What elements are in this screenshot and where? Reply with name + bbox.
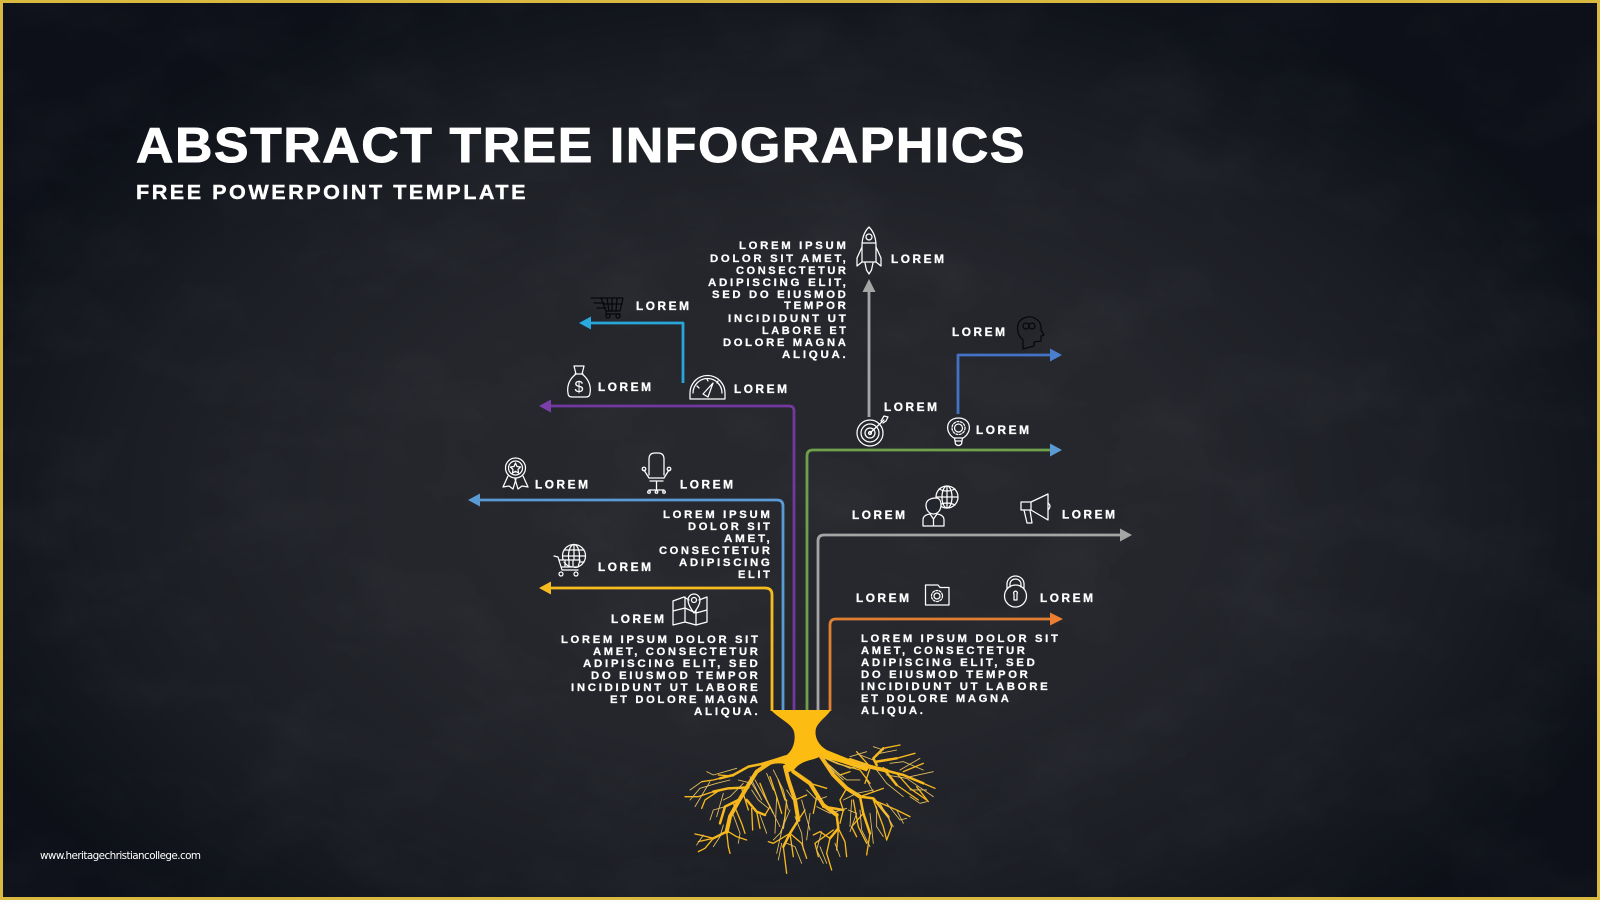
- text block: rocket paragraph: DOLOR SIT AMET,: [710, 253, 848, 265]
- text block: orange branch paragraph: INCIDIDUNT UT LABORE: [861, 681, 1050, 693]
- icon: gear folder: [926, 585, 949, 605]
- branch: dark blue arrow: [958, 348, 1062, 414]
- text block: yellow branch paragraph: DO EIUSMOD TEMPOR: [591, 670, 760, 682]
- label: cart: LOREM: [636, 300, 692, 313]
- text block: blue branch paragraph: CONSECTETUR: [659, 545, 772, 557]
- branch: orange arrow: [830, 612, 1063, 711]
- text block: yellow branch paragraph: ALIQUA.: [694, 706, 760, 718]
- website url: www.heritagechristiancollege.com: [40, 850, 201, 862]
- text block: orange branch paragraph: ALIQUA.: [861, 705, 926, 717]
- icon: map with pin: [673, 594, 707, 625]
- text block: rocket paragraph: DOLORE MAGNA: [723, 337, 848, 349]
- text block: rocket paragraph: SED DO EIUSMOD: [712, 289, 848, 301]
- title: ABSTRACT TREE INFOGRAPHICS: [136, 119, 1026, 173]
- text block: blue branch paragraph: DOLOR SIT: [688, 521, 772, 533]
- text block: rocket paragraph: LABORE ET: [762, 325, 848, 337]
- icon: gauge: [690, 376, 725, 399]
- icon: award ribbon: [503, 458, 528, 489]
- text block: yellow branch paragraph: LOREM IPSUM DOLOR SIT: [561, 634, 760, 646]
- branch: yellow arrow: [539, 582, 772, 711]
- icon: megaphone: [1021, 494, 1050, 523]
- label: gauge: LOREM: [734, 383, 790, 396]
- label: map: LOREM: [611, 613, 666, 626]
- text block: orange branch paragraph: AMET, CONSECTETUR: [861, 645, 1028, 657]
- text block: orange branch paragraph: DO EIUSMOD TEMPOR: [861, 669, 1030, 681]
- label: rocket: LOREM: [891, 253, 946, 266]
- trunk: [759, 710, 870, 773]
- icon: light bulb with gear: [948, 418, 969, 446]
- text block: blue branch paragraph: ADIPISCING: [679, 557, 772, 569]
- label: chair: LOREM: [680, 478, 736, 492]
- icon: person with globe: [923, 486, 958, 526]
- text block: yellow branch paragraph: [561, 634, 760, 718]
- branch: cyan arrow: [579, 316, 683, 383]
- icon: money bag: $: [575, 379, 584, 396]
- branch: upward grey arrow: [862, 279, 876, 417]
- text block: yellow branch paragraph: ET DOLORE MAGNA: [610, 694, 760, 706]
- label: person: LOREM: [852, 509, 908, 522]
- secondary roots: [713, 748, 923, 847]
- text block: blue branch paragraph: AMET,: [724, 533, 772, 545]
- tree roots: [685, 710, 935, 873]
- label: megaphone: LOREM: [1062, 508, 1118, 522]
- text block: rocket paragraph: ADIPISCING ELIT,: [708, 277, 848, 289]
- main roots: [727, 755, 887, 832]
- branch: purple arrow: [539, 400, 794, 711]
- icon: globe cart: [554, 544, 586, 576]
- text block: blue branch paragraph: ELIT: [738, 569, 772, 581]
- text block: rocket paragraph: LOREM IPSUM: [739, 240, 848, 252]
- text block: yellow branch paragraph: ADIPISCING ELIT, SED: [583, 658, 760, 670]
- root twigs: [690, 747, 933, 863]
- label: award: LOREM: [535, 478, 590, 492]
- icon: shopping cart (dark): [591, 298, 623, 318]
- text block: rocket paragraph: ALIQUA.: [782, 349, 848, 361]
- icon: target: [857, 416, 888, 446]
- text block: rocket paragraph: [708, 240, 848, 361]
- branch: green arrow: [807, 444, 1062, 711]
- text block: rocket paragraph: CONSECTETUR: [736, 265, 848, 277]
- text block: yellow branch paragraph: INCIDIDUNT UT LABORE: [571, 682, 760, 694]
- branch: grey arrow: [818, 528, 1132, 711]
- subtitle: FREE POWERPOINT TEMPLATE: [136, 181, 528, 204]
- label: folder: LOREM: [856, 592, 912, 605]
- icon: head (dark): [1018, 317, 1044, 349]
- text block: orange branch paragraph: [861, 633, 1060, 717]
- icon: padlock: [1004, 576, 1026, 607]
- label: bulb: LOREM: [976, 424, 1032, 437]
- text block: orange branch paragraph: ET DOLORE MAGNA: [861, 693, 1012, 705]
- text block: orange branch paragraph: LOREM IPSUM DOLOR SIT: [861, 633, 1060, 645]
- fine roots: [685, 745, 935, 873]
- text block: blue branch paragraph: LOREM IPSUM: [663, 509, 772, 521]
- label: head: LOREM: [952, 326, 1008, 339]
- text block: rocket paragraph: TEMPOR: [784, 300, 848, 312]
- icon: office chair: [642, 453, 671, 493]
- text block: blue branch paragraph: [659, 509, 772, 581]
- text block: rocket paragraph: INCIDIDUNT UT: [728, 313, 848, 325]
- branch: light blue arrow: [468, 494, 783, 711]
- label: globe cart: LOREM: [598, 561, 654, 574]
- label: target: LOREM: [884, 401, 940, 414]
- icon: money bag: [568, 366, 590, 397]
- text block: yellow branch paragraph: AMET, CONSECTETUR: [593, 646, 760, 658]
- text block: orange branch paragraph: ADIPISCING ELIT, SED: [861, 657, 1038, 669]
- label: padlock: LOREM: [1040, 592, 1096, 605]
- icon: rocket: [857, 227, 881, 274]
- label: money: LOREM: [598, 381, 654, 394]
